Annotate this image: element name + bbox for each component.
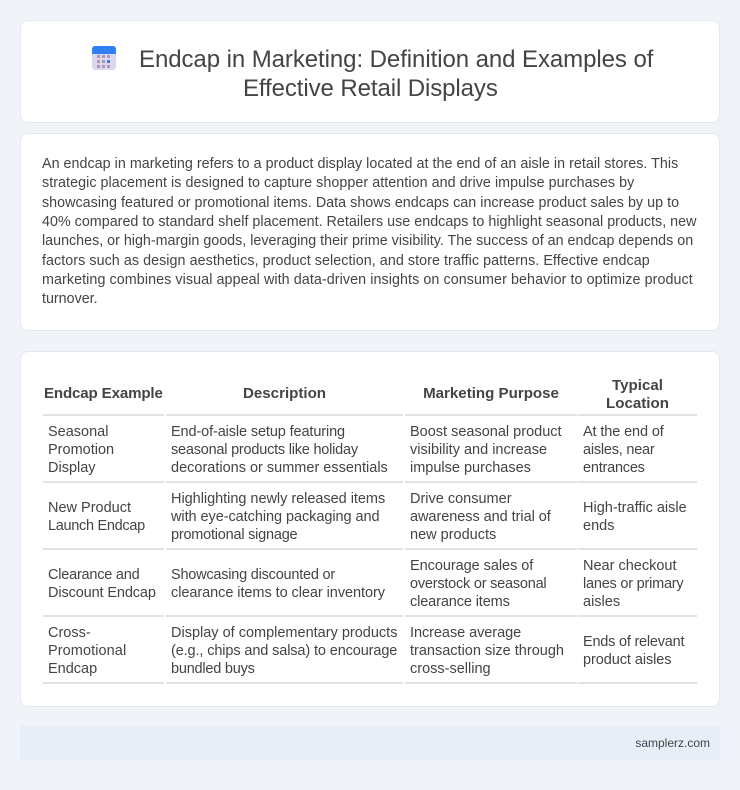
table row: cross-promotional: product aisles: [583, 652, 671, 668]
table row: new product launch: Highlighting newly released items: [171, 491, 385, 507]
table row: seasonal promotion: entrances: [583, 460, 645, 476]
paragraph: 40% compared to standard shelf placement. Retailers use endcaps to highlight seasonal products, new: [42, 214, 696, 230]
paragraph: An endcap in marketing refers to a product display located at the end of an aisle in retail stores. This: [42, 156, 678, 172]
table row: new product launch: ends: [583, 518, 614, 534]
table row: cross-promotional: Promotional: [48, 643, 126, 659]
table row: seasonal promotion: decorations or summer essentials: [171, 460, 388, 476]
footer bar: [20, 726, 720, 760]
table row: cross-promotional: Cross-: [48, 625, 91, 641]
table row: clearance and discount: Encourage sales of: [410, 558, 533, 574]
table row: clearance and discount: aisles: [583, 594, 620, 610]
table header: Description: [243, 385, 326, 402]
table row: cross-promotional: [43, 625, 697, 684]
table row: seasonal promotion: Boost seasonal product: [410, 424, 562, 440]
table row: new product launch: new products: [410, 527, 496, 543]
table row: cross-promotional: Increase average: [410, 625, 521, 641]
table row: clearance and discount: Showcasing discounted or: [171, 567, 335, 583]
table row: cross-promotional: cross-selling: [410, 661, 491, 677]
panel: header: [20, 20, 720, 123]
table row: new product launch: Launch Endcap: [48, 518, 145, 534]
table row: seasonal promotion: At the end of: [583, 424, 664, 440]
paragraph: turnover.: [42, 291, 98, 307]
table row: clearance and discount: clearance items to clear inventory: [171, 585, 385, 601]
table row: seasonal promotion: Seasonal: [48, 424, 108, 440]
table row: cross-promotional: Display of complementary products: [171, 625, 397, 641]
table row: clearance and discount: [43, 558, 697, 617]
table header: [43, 376, 697, 416]
table row: seasonal promotion: [43, 424, 697, 483]
table header: Marketing Purpose: [423, 385, 559, 402]
table header: Location: [606, 395, 669, 412]
table row: clearance and discount: Clearance and: [48, 567, 139, 583]
table row: clearance and discount: Near checkout: [583, 558, 676, 574]
table row: seasonal promotion: Promotion: [48, 442, 114, 458]
table row: seasonal promotion: aisles, near: [583, 442, 655, 458]
table row: new product launch: [43, 491, 697, 550]
footer text: samplerz.com: [635, 736, 710, 750]
table row: new product launch: New Product: [48, 500, 131, 516]
table row: cross-promotional: (e.g., chips and salsa) to encourage: [171, 643, 397, 659]
title: [139, 46, 654, 102]
table row: seasonal promotion: visibility and increase: [410, 442, 547, 458]
table header: Endcap Example: [44, 385, 163, 402]
table row: new product launch: Drive consumer: [410, 491, 512, 507]
table row: cross-promotional: transaction size through: [410, 643, 564, 659]
paragraph: marketing combines visual appeal with data-driven insights on consumer behavior to optimize product: [42, 272, 693, 288]
table row: cross-promotional: Endcap: [48, 661, 97, 677]
table row: clearance and discount: overstock or seasonal: [410, 576, 546, 592]
paragraph: [42, 156, 696, 307]
table row: new product launch: with eye-catching packaging and: [171, 509, 380, 525]
table row: clearance and discount: lanes or primary: [583, 576, 683, 592]
paragraph: factors such as design aesthetics, product selection, and store traffic patterns. Effective endcap: [42, 252, 650, 268]
icon: calendar: [92, 46, 116, 70]
table row: cross-promotional: Ends of relevant: [583, 634, 684, 650]
title: Endcap in Marketing: Definition and Examples of: [139, 46, 653, 73]
table row: seasonal promotion: End-of-aisle setup featuring: [171, 424, 345, 440]
paragraph: showcasing featured or promotional items. Data shows endcaps can increase product sales by up to: [42, 195, 679, 211]
table row: new product launch: promotional signage: [171, 527, 297, 543]
title: Effective Retail Displays: [243, 75, 498, 102]
table row: seasonal promotion: seasonal products like holiday: [171, 442, 358, 458]
table header: Typical: [612, 376, 663, 394]
paragraph: launches, or high-margin goods, leveraging their prime visibility. The success of an endcap depends on: [42, 233, 693, 249]
panel: table: [20, 351, 720, 707]
table row: new product launch: awareness and trial of: [410, 509, 551, 525]
table row: clearance and discount: Discount Endcap: [48, 585, 156, 601]
paragraph: strategic placement is designed to capture shopper attention and drive impulse purchases by: [42, 175, 634, 191]
table row: seasonal promotion: impulse purchases: [410, 460, 531, 476]
table row: seasonal promotion: Display: [48, 460, 96, 476]
table row: new product launch: High-traffic aisle: [583, 500, 687, 516]
table row: clearance and discount: clearance items: [410, 594, 510, 610]
panel: intro text: [20, 133, 720, 331]
table row: cross-promotional: bundled buys: [171, 661, 255, 677]
